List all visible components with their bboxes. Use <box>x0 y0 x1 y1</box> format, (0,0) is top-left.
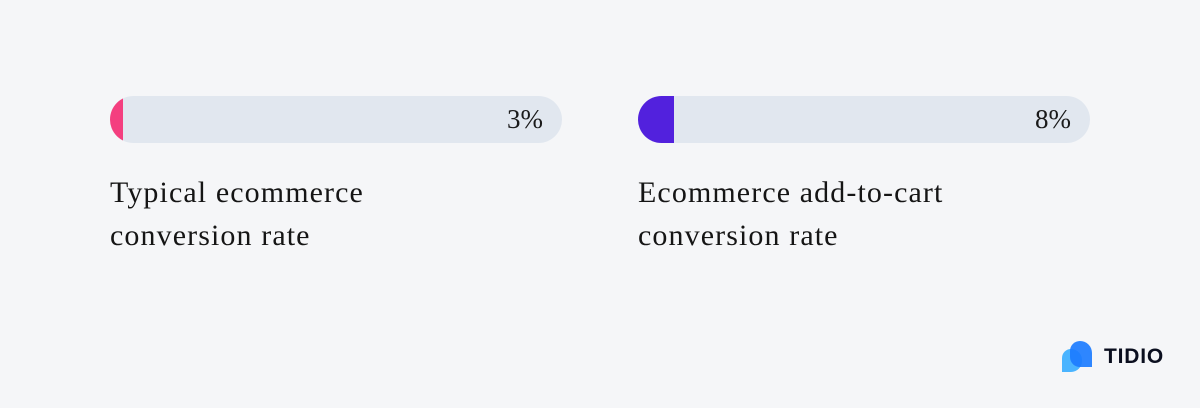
bar fill purple <box>638 96 674 143</box>
label: typical ecommerce conversion rate <box>110 176 364 252</box>
logo: TIDIO <box>1062 341 1164 372</box>
label: add-to-cart conversion rate: Ecommerce add-to-cart <box>638 176 943 209</box>
label: add-to-cart conversion rate <box>638 176 943 252</box>
bar: 8% <box>638 96 1090 143</box>
bar fill pink <box>110 96 123 143</box>
label: typical ecommerce conversion rate: conversion rate <box>110 219 311 252</box>
value 8%: 8% <box>1035 104 1071 134</box>
bar: 3% <box>110 96 562 143</box>
logo text: TIDIO <box>1104 345 1164 368</box>
icon: tidio bubbles <box>1062 341 1092 372</box>
label: typical ecommerce conversion rate: Typical ecommerce <box>110 176 364 209</box>
label: add-to-cart conversion rate: conversion rate <box>638 219 839 252</box>
value 3%: 3% <box>507 104 543 134</box>
